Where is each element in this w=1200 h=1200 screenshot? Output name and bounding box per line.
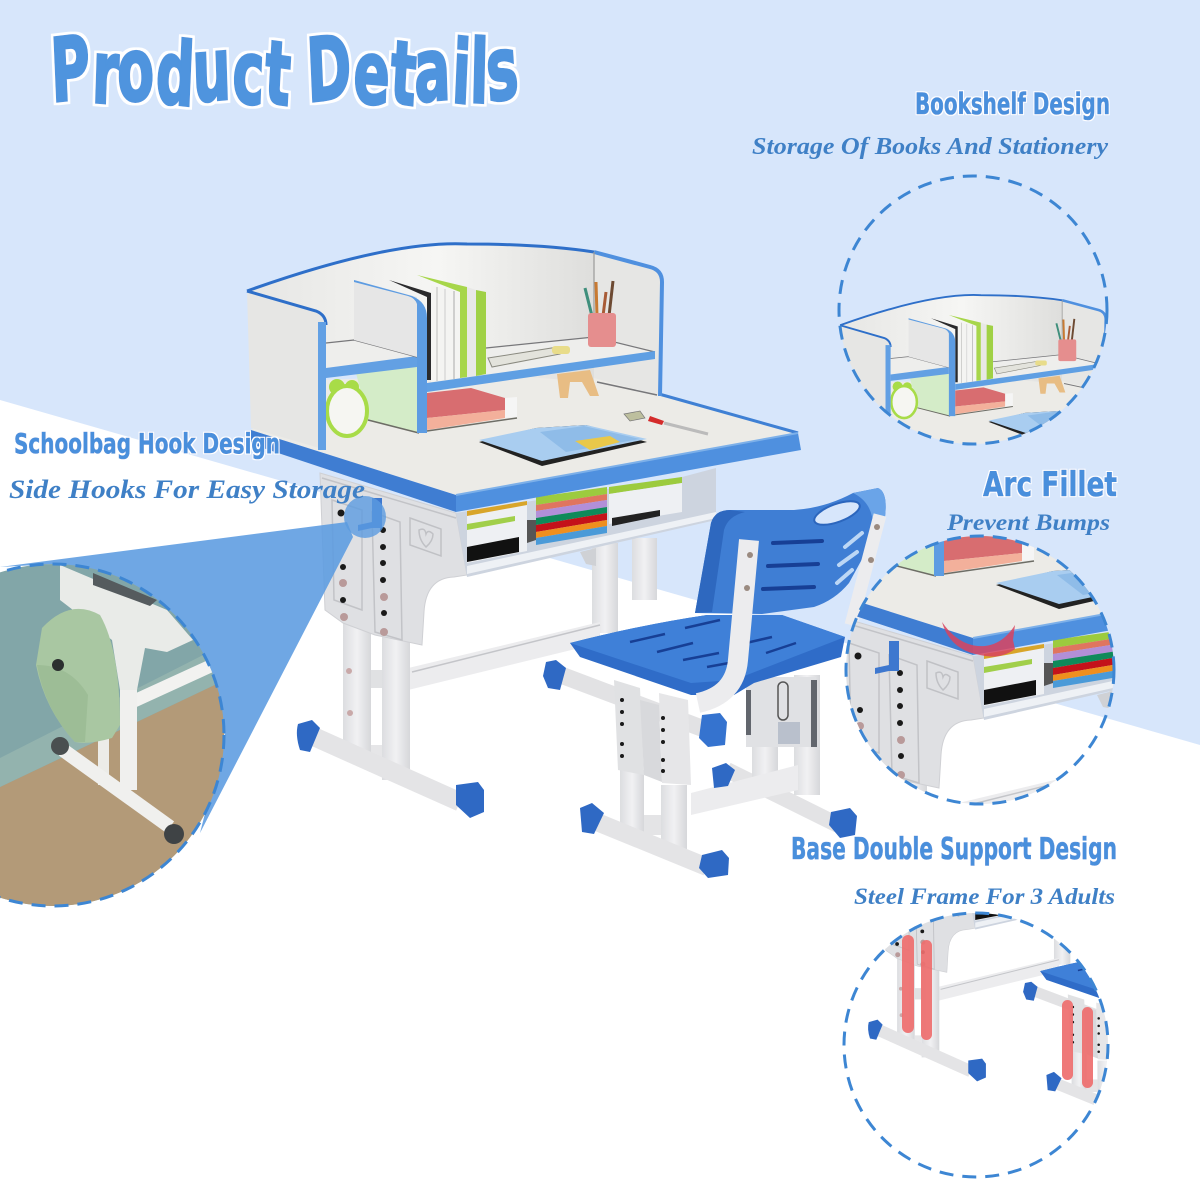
desk rear legs and foot — [543, 538, 727, 747]
hutch back panel — [247, 244, 594, 382]
title: Product Details — [46, 17, 522, 126]
row of books — [389, 275, 486, 382]
backrest slots — [763, 533, 862, 589]
open book — [479, 425, 647, 466]
text: schoolbag subtitle: Side Hooks For Easy Storage — [9, 475, 365, 504]
divider panel — [354, 280, 417, 357]
chair right strut — [851, 515, 880, 625]
long shelf — [427, 337, 655, 392]
chair — [570, 488, 886, 878]
chair front legs — [580, 680, 729, 878]
detail circle: arc fillet — [844, 534, 1116, 806]
detail circle: bookshelf — [838, 174, 1108, 446]
under-desk book tray — [456, 468, 716, 577]
backpack — [36, 609, 120, 743]
apron plate lines — [322, 478, 456, 640]
hook highlight circle — [344, 496, 386, 538]
height mechanism — [746, 677, 817, 747]
pink books — [427, 388, 517, 431]
schoolbag hook — [358, 498, 382, 531]
chair rear legs — [691, 675, 857, 838]
desk front legs and foot — [297, 610, 484, 818]
text: base subtitle: Steel Frame For 3 Adults — [854, 884, 1115, 909]
table parts — [60, 565, 193, 690]
detail circle: base double support — [842, 912, 1110, 1178]
red arc arrow — [942, 622, 1015, 657]
short shelf — [326, 340, 417, 378]
chair back strut — [698, 540, 753, 703]
hutch floor line — [597, 382, 657, 395]
detail circle: schoolbag hook photo — [0, 560, 230, 910]
wooden toy — [557, 370, 599, 398]
text: bookshelf subtitle: Storage Of Books And Stationery — [752, 134, 1108, 160]
chair seat — [570, 615, 845, 695]
heading: bookshelf design: Bookshelf Design — [915, 87, 1110, 121]
hutch top rim — [247, 244, 594, 291]
green alarm clock — [327, 379, 367, 436]
heart emblem — [410, 518, 441, 556]
chair backrest — [695, 488, 886, 614]
floor — [0, 680, 230, 910]
divider blue edge — [354, 280, 427, 433]
desk crossbar — [400, 622, 600, 692]
desk with hutch — [247, 244, 801, 818]
hutch right panel — [594, 252, 662, 396]
desk side apron — [320, 473, 467, 645]
hutch left panel — [247, 291, 326, 450]
text: arc fillet subtitle: Prevent Bumps — [946, 510, 1110, 535]
wall — [0, 560, 230, 910]
heading: schoolbag hook design: Schoolbag Hook Design — [14, 427, 280, 460]
magnifier wedge from hook to left circle — [0, 522, 353, 833]
pencil cup — [585, 281, 616, 347]
green cubby back — [356, 366, 419, 433]
eraser and pen — [624, 411, 708, 434]
adjustment holes — [338, 510, 388, 636]
desktop — [251, 370, 801, 512]
heading: arc fillet: Arc Fillet — [983, 465, 1117, 505]
backrest hole — [811, 496, 863, 530]
